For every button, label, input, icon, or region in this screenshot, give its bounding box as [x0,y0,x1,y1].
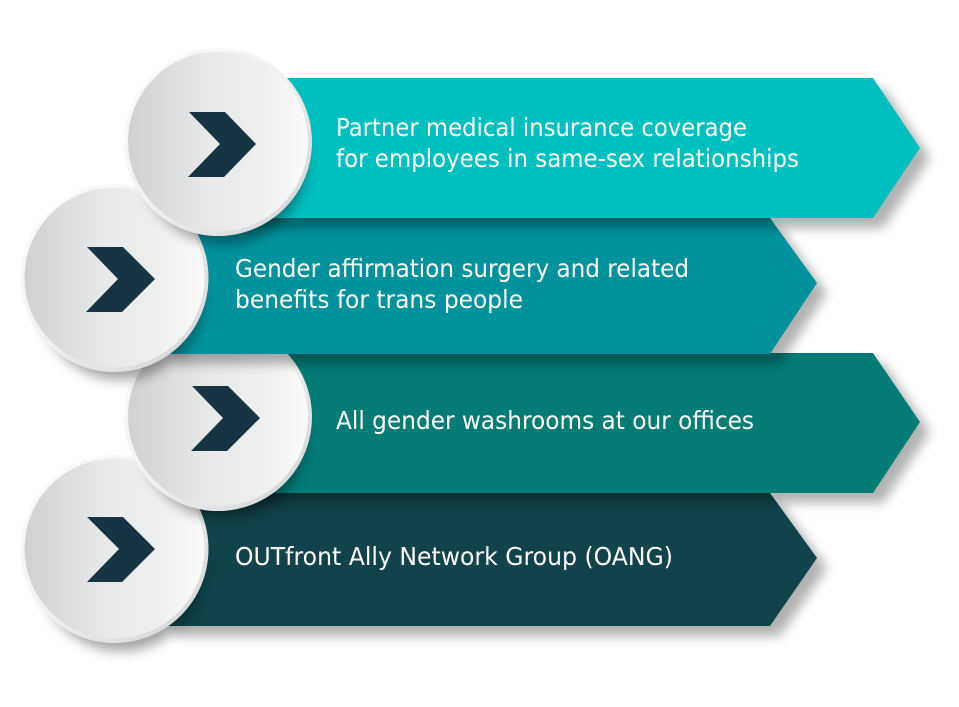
label 4: OUTfront Ally Network Group (OANG) [235,542,673,571]
circle 3 [124,323,312,519]
arrow 4: OUTfront Ally Network Group [165,493,827,636]
circle 2 [20,184,208,380]
icon: chevron 3 [191,386,260,451]
arrow 2: Gender affirmation surgery [165,218,827,364]
label 2: Gender affirmation surgery and related [235,254,689,283]
icon: chevron 1 [188,112,256,177]
circle 1 [124,48,312,244]
label 1: Partner medical insurance coverage [336,113,747,142]
label 3: All gender washrooms at our offices [336,406,754,435]
icon: chevron 4 [87,517,155,582]
label 2, second line: benefits for trans people [235,285,523,314]
icon: chevron 2 [86,247,155,312]
circle 4 [20,455,208,651]
arrow 3: All gender washrooms [230,353,930,503]
arrow 1: Partner medical insurance [230,78,930,228]
label 1, second line: for employees in same-sex relationships [336,144,799,173]
